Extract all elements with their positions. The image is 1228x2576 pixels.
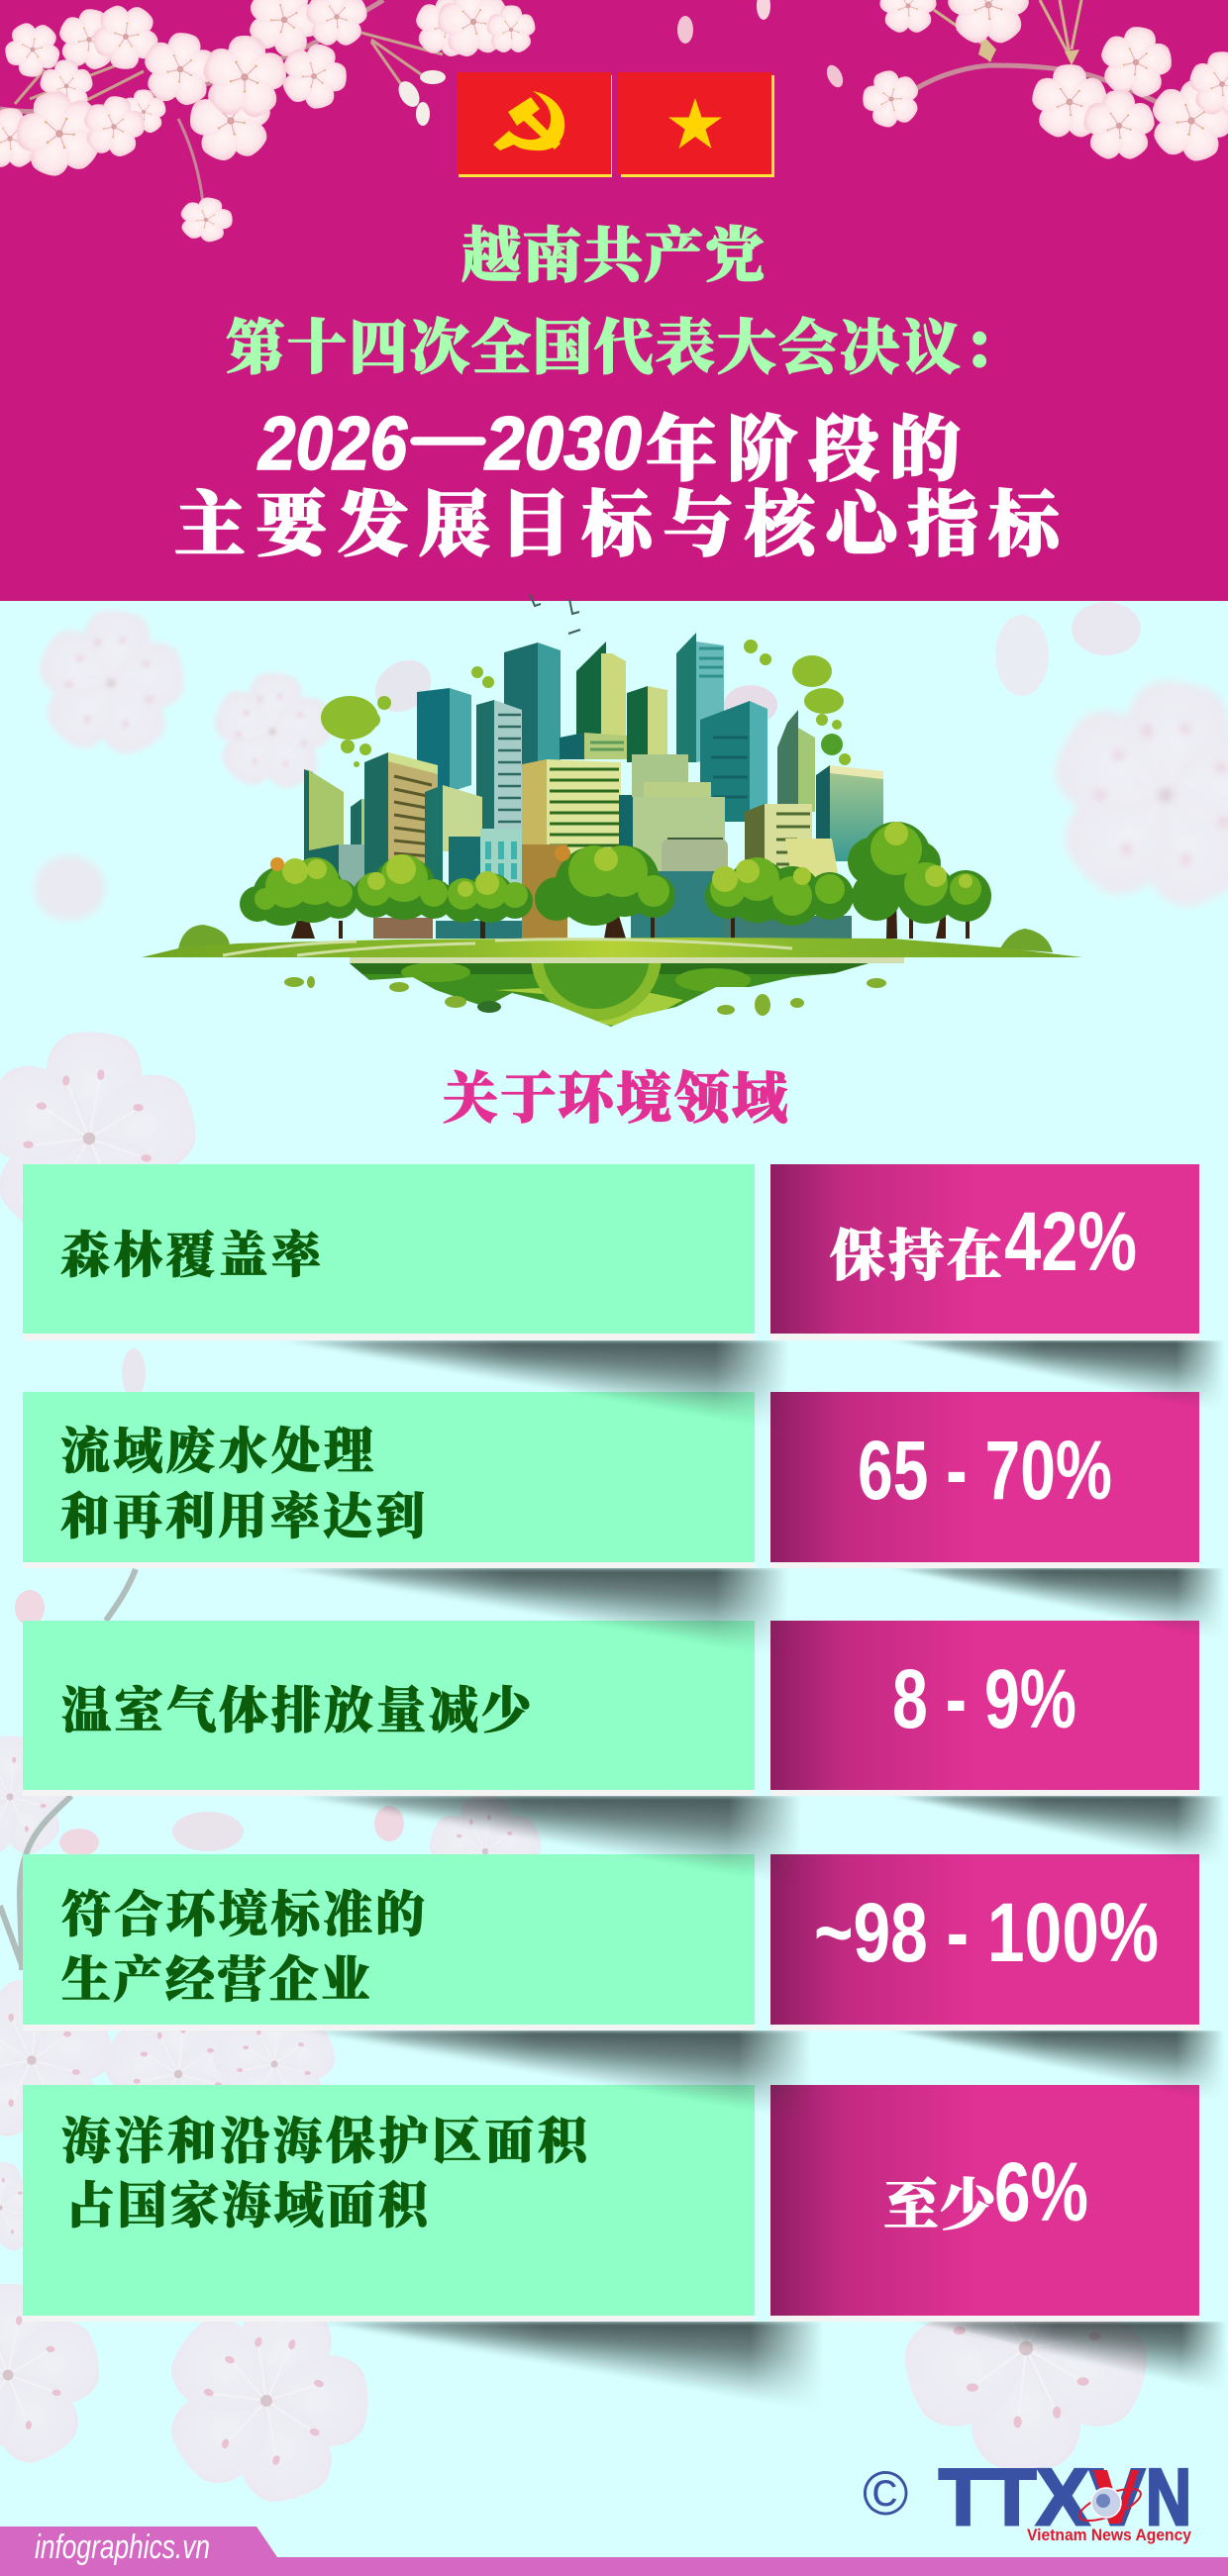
logo: TTXVN: TTX (939, 2453, 1089, 2542)
footer source text: infographics.vn (35, 2528, 210, 2566)
trees (240, 822, 991, 939)
title line 3 (256, 402, 961, 490)
label: marine line 1: 海洋和沿海保护区面积 (61, 2114, 592, 2169)
birds (530, 594, 580, 634)
title line 3: 年阶段的 (646, 411, 961, 490)
header panel (0, 0, 1228, 601)
back buildings (417, 633, 883, 861)
row values (814, 1195, 1159, 2238)
copyright mark: © (863, 2459, 908, 2528)
illustration: green city (142, 594, 1082, 1030)
label: enterprises line 1: 符合环境标准的 (61, 1887, 425, 1942)
row 4 value panel (770, 1854, 1199, 2025)
title line 3: 2026 (256, 402, 408, 486)
row 5 (23, 2085, 1199, 2322)
row 2 label panel (23, 1392, 755, 1562)
row 2 value panel (770, 1392, 1199, 1562)
label: greenhouse gas: 温室气体排放量减少 (61, 1683, 536, 1738)
row 1 label panel (23, 1164, 755, 1334)
value: 8-9%: 8 - 9% (892, 1652, 1076, 1745)
row 5 value panel (770, 2085, 1199, 2316)
row 3 value panel (770, 1621, 1199, 1790)
header blossom branch left (0, 0, 770, 249)
label: forest cover: 森林覆盖率 (60, 1228, 323, 1283)
title line 2: 第十四次全国代表大会决议： (226, 316, 1022, 381)
label: enterprises line 2: 生产经营企业 (61, 1952, 370, 2008)
front buildings (304, 733, 852, 939)
row 5 label panel (23, 2085, 755, 2316)
logo: TTXVN: Vietnam News Agency (1027, 2526, 1191, 2544)
row 2 (23, 1392, 1199, 1568)
logo: TTXVN (939, 2453, 1191, 2544)
row 4 label panel (23, 1854, 755, 2025)
title line 4: 主要发展目标与核心指标 (174, 486, 1067, 565)
value: keep at 42% (830, 1195, 1137, 1288)
title line 1: 越南共产党 (461, 224, 765, 289)
floating foliage (321, 640, 851, 767)
ground (142, 925, 1082, 963)
value: at least 6%: 至少 (883, 2176, 1000, 2237)
icon: hammer and sickle (493, 91, 564, 150)
value: keep at 42%: 保持在 (830, 1227, 1002, 1288)
value: at least 6%: 6% (994, 2145, 1088, 2238)
section heading: 关于环境领域 (443, 1069, 787, 1131)
title line 3: 2030 (483, 402, 642, 486)
logo: TTXVN: N (1146, 2453, 1191, 2542)
row 3 (23, 1621, 1199, 1796)
icon: yellow star (668, 98, 722, 149)
label: marine line 2: 占国家海域面积 (65, 2178, 433, 2233)
row 1 value panel (770, 1164, 1199, 1334)
decorative pale blossoms (0, 600, 1228, 2538)
row labels (60, 1228, 592, 2233)
label: wastewater line 1: 流域废水处理 (60, 1424, 373, 1479)
title (174, 224, 1067, 565)
value: 65-70%: 65 - 70% (858, 1424, 1112, 1517)
value: at least 6% (883, 2145, 1088, 2238)
party flag (458, 72, 612, 177)
row 1 (23, 1164, 1199, 1340)
header blossom branch right (824, 0, 1228, 174)
label: wastewater line 2: 和再利用率达到 (60, 1489, 425, 1544)
logo: TTXVN: V (1089, 2453, 1145, 2542)
value: keep at 42%: 42% (1004, 1195, 1137, 1288)
national flag (618, 72, 774, 177)
row 3 label panel (23, 1621, 755, 1790)
underside foliage (284, 963, 886, 1027)
row 4 (23, 1854, 1199, 2031)
footer band (0, 2526, 1228, 2576)
row drop shadows (274, 1340, 1228, 2424)
